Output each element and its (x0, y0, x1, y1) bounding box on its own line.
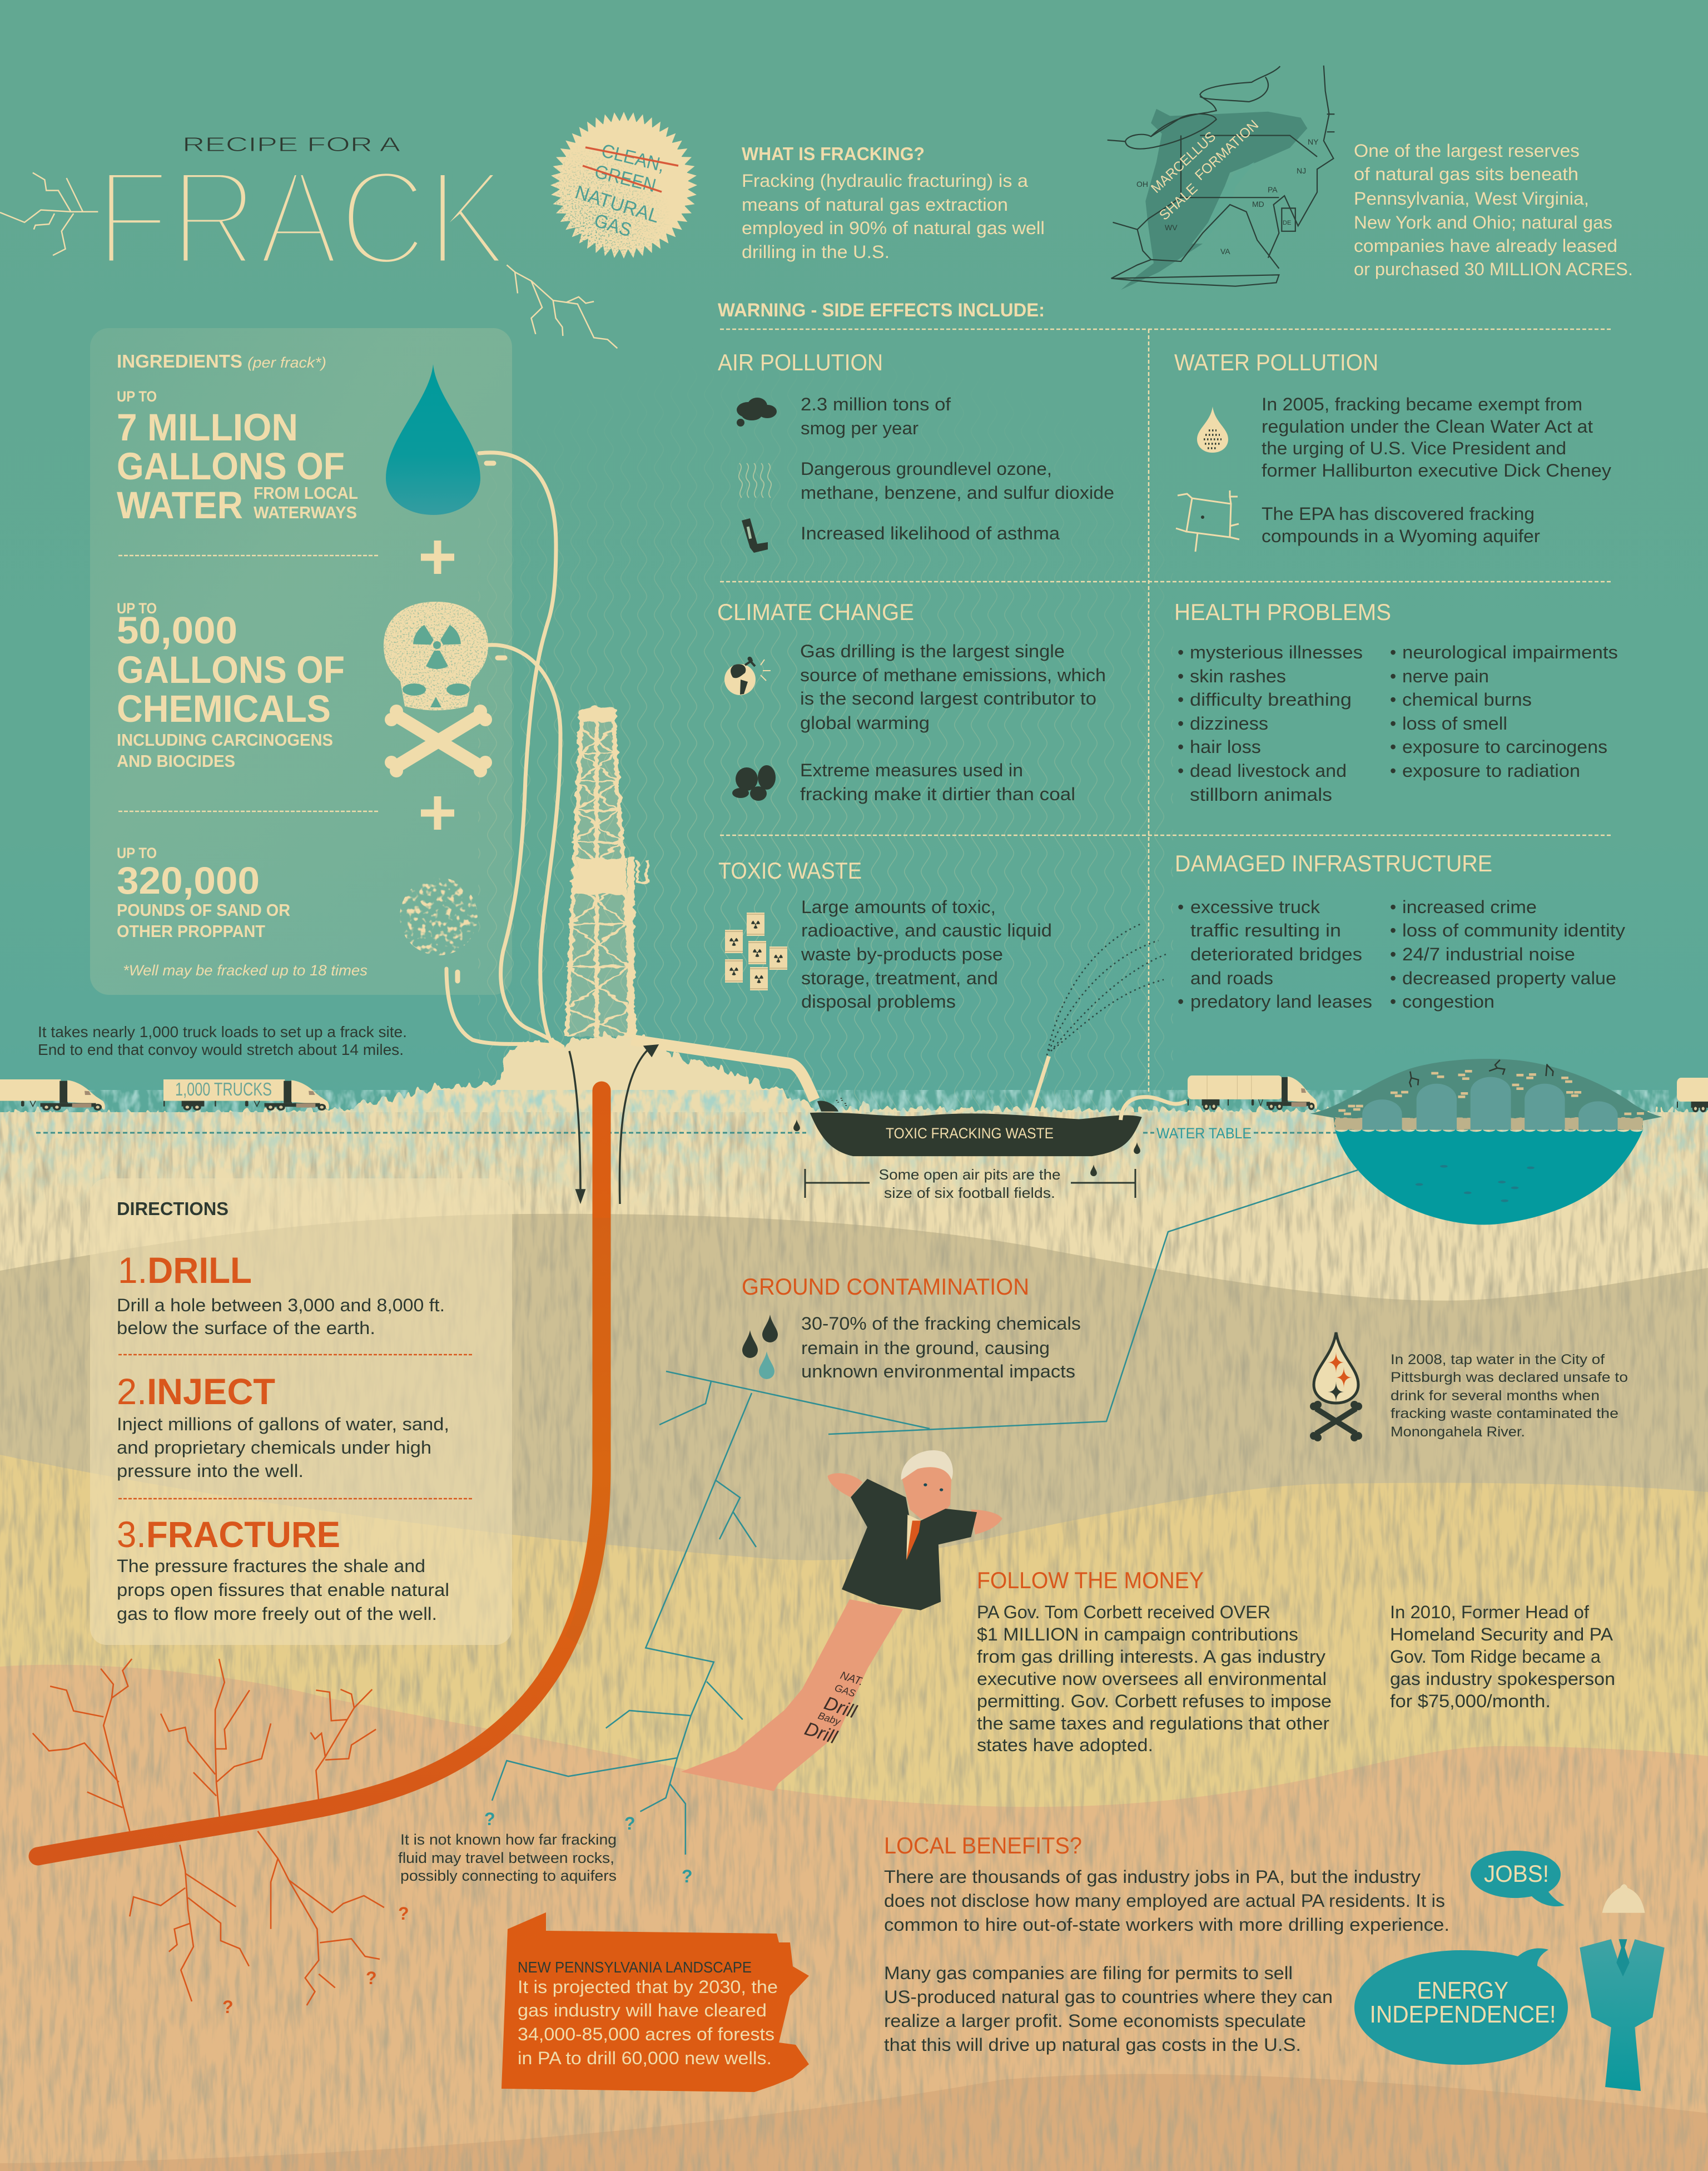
panel: damaged infrastructure: traffic resulting in (1190, 920, 1341, 940)
tom ridge note: Gov. Tom Ridge became a (1390, 1647, 1601, 1667)
feed pipes into the well (446, 453, 563, 1048)
step 2: pressure into the well. (117, 1461, 304, 1481)
pittsburgh callout: drink for several months when (1391, 1388, 1600, 1404)
water table label: WATER TABLE (1156, 1125, 1252, 1142)
drilling rig (567, 706, 647, 1038)
icon: contaminated drop (1197, 407, 1228, 453)
fluid travel note: It is not known how far fracking (400, 1831, 617, 1848)
map caption: Pennsylvania, West Virginia, (1354, 189, 1589, 209)
panel: health problems: • (1178, 666, 1184, 686)
chemicals amount: CHEMICALS (117, 687, 331, 730)
new pennsylvania landscape: 34,000-85,000 acres of forests (518, 2024, 774, 2044)
tattoo: Drill (822, 1692, 860, 1723)
toxic fracking waste pit: TOXIC FRACKING WASTE (886, 1125, 1054, 1142)
fluid travel note: possibly connecting to aquifers (400, 1867, 617, 1884)
ground layers (0, 1034, 1708, 2171)
map labels: MARCELLUS (1148, 128, 1219, 196)
puppet politician (681, 1450, 1002, 1791)
map caption: New York and Ohio; natural gas (1354, 212, 1612, 232)
orange question marks: ? (398, 1904, 409, 1924)
step 1: 1.DRILL (118, 1250, 252, 1291)
panel: health problems: HEALTH PROBLEMS (1174, 599, 1391, 625)
trucks caption (38, 1023, 407, 1058)
step 1: Drill a hole between 3,000 and 8,000 ft. (117, 1295, 445, 1315)
panel: health problems: • (1178, 713, 1184, 733)
tattoo: NAT. (838, 1669, 865, 1688)
panel: health problems: • (1390, 761, 1396, 781)
step 2: Inject millions of gallons of water, sand, (117, 1414, 449, 1434)
panel: water pollution: compounds in a Wyoming aquifer (1262, 526, 1540, 546)
ground contamination: unknown environmental impacts (801, 1361, 1075, 1381)
panel: damaged infrastructure: • (1178, 897, 1184, 917)
panel: damaged infrastructure: 24/7 industrial noise (1402, 944, 1575, 964)
panel: water pollution: The EPA has discovered fracking (1262, 504, 1535, 524)
collar and tie (906, 1515, 921, 1559)
icon: smog cloud (737, 398, 777, 427)
hands (827, 1473, 1002, 1535)
stamp text: NATURAL (573, 182, 662, 227)
teal question marks (484, 1809, 693, 1886)
panel: air pollution: Increased likelihood of asthma (801, 523, 1060, 543)
panel: air pollution: smog per year (801, 418, 918, 438)
background sky (0, 0, 1708, 1168)
panel: damaged infrastructure (1175, 850, 1625, 1012)
teal question marks: ? (682, 1866, 693, 1886)
tom ridge note: In 2010, Former Head of (1390, 1602, 1589, 1622)
bricks (1338, 1070, 1644, 1115)
panel: climate change: fracking make it dirtier than coal (800, 784, 1075, 804)
panel: water pollution: In 2005, fracking became exempt from (1262, 394, 1582, 414)
panel: water pollution (1174, 349, 1611, 552)
follow the money: permitting. Gov. Corbett refuses to impose (977, 1691, 1332, 1711)
tattoo: GAS (833, 1682, 857, 1699)
footnote: *Well may be fracked up to 18 times (123, 962, 368, 979)
map caption: companies have already leased (1354, 236, 1617, 256)
map: marcellus shale formation: DE (1283, 220, 1291, 226)
panel: health problems: • (1178, 690, 1184, 710)
icon: contaminant drops (742, 1315, 778, 1379)
chemicals amount: UP TO (117, 600, 157, 617)
teal question marks: ? (624, 1813, 635, 1833)
pipe outflow (817, 1101, 838, 1112)
local benefits: that this will drive up natural gas costs in the U.S. (884, 2035, 1301, 2055)
panel: health problems: dizziness (1190, 713, 1268, 733)
ground contamination: GROUND CONTAMINATION (742, 1273, 1029, 1300)
ingredients heading (117, 351, 326, 371)
panel: damaged infrastructure: loss of community identity (1402, 920, 1625, 940)
proppant amount: UP TO (117, 845, 157, 861)
panel: health problems: • (1178, 761, 1184, 781)
step 3 (117, 1514, 449, 1624)
step 1 (117, 1250, 445, 1338)
ingredients heading: INGREDIENTS (117, 351, 242, 371)
icon: waste barrels (725, 913, 787, 990)
panel: health problems: stillborn animals (1190, 785, 1332, 805)
icon: water drop (386, 364, 480, 515)
panel: damaged infrastructure: increased crime (1402, 897, 1537, 917)
map caption: One of the largest reserves (1354, 141, 1580, 161)
map caption: or purchased 30 MILLION ACRES. (1354, 259, 1633, 279)
map: marcellus shale formation: VA (1220, 247, 1230, 256)
water amount (117, 388, 358, 527)
stamp text: GREEN (593, 161, 658, 196)
what is fracking text block: Fracking (hydraulic fracturing) is a (742, 171, 1028, 191)
panel: directions (90, 1178, 512, 1645)
step 2: and proprietary chemicals under high (117, 1438, 431, 1458)
hair (901, 1450, 953, 1480)
bridge body (1310, 1059, 1662, 1130)
tom ridge note: gas industry spokesperson (1390, 1669, 1615, 1689)
water table dashed line (36, 1132, 1337, 1133)
chemicals amount: AND BIOCIDES (117, 751, 235, 771)
icon: inhaler (742, 518, 768, 553)
icon: skull and crossbones (384, 602, 492, 777)
step 3: props open fissures that enable natural (117, 1580, 449, 1600)
suit (842, 1479, 977, 1610)
speech bubble: energy independence: INDEPENDENCE! (1370, 2001, 1556, 2028)
reservoir water (1335, 1129, 1644, 1225)
what is fracking text block: means of natural gas extraction (742, 195, 1008, 215)
panel: toxic waste: TOXIC WASTE (718, 858, 862, 884)
panel: damaged infrastructure: congestion (1402, 992, 1494, 1012)
stamp text (573, 140, 667, 241)
panel: health problems: exposure to carcinogens (1402, 737, 1607, 757)
panel: air pollution: methane, benzene, and sulfur dioxide (801, 483, 1114, 503)
title (0, 133, 617, 348)
water amount: WATER (117, 484, 243, 527)
step 3: The pressure fractures the shale and (117, 1556, 425, 1576)
title word: FRACK (96, 141, 508, 294)
speech bubble: jobs: JOBS! (1484, 1861, 1549, 1887)
new pennsylvania landscape (502, 1912, 809, 2092)
panel: water pollution: the urging of U.S. Vice President and (1262, 438, 1566, 458)
ground contamination (742, 1273, 1081, 1381)
chemicals amount (117, 600, 345, 771)
tom ridge note: Homeland Security and PA (1390, 1624, 1613, 1644)
water amount: 7 MILLION (117, 406, 298, 449)
map: marcellus shale formation: NJ (1297, 166, 1306, 175)
panel: climate change: global warming (800, 713, 930, 733)
panel: damaged infrastructure: DAMAGED INFRASTRUCTURE (1175, 850, 1492, 876)
panel: damaged infrastructure: decreased property value (1402, 968, 1616, 988)
map labels: FORMATION (1192, 117, 1262, 184)
pittsburgh callout: Monongahela River. (1391, 1424, 1525, 1440)
panel: damaged infrastructure: • (1178, 992, 1184, 1012)
panel: damaged infrastructure: • (1390, 992, 1396, 1012)
follow the money: the same taxes and regulations that other (977, 1713, 1329, 1733)
spray pipe (1031, 1056, 1049, 1113)
new pennsylvania landscape: It is projected that by 2030, the (518, 1977, 778, 1997)
panel: air pollution: 2.3 million tons of (801, 394, 951, 414)
follow the money (977, 1567, 1615, 1755)
local benefits: Many gas companies are filing for permits to sell (884, 1963, 1293, 1983)
step 2: 2.INJECT (117, 1371, 275, 1412)
panel: health problems (1174, 599, 1618, 805)
what is fracking text block: employed in 90% of natural gas well (742, 218, 1045, 238)
panel: water pollution: regulation under the Clean Water Act at (1262, 417, 1593, 437)
title kicker: RECIPE FOR A (182, 133, 400, 156)
ingredients heading: (per frack*) (247, 354, 326, 371)
neck and head (902, 1461, 951, 1520)
panel: damaged infrastructure: and roads (1190, 968, 1273, 988)
panel: health problems: • (1390, 690, 1396, 710)
panel: damaged infrastructure: • (1390, 944, 1396, 964)
step 3: gas to flow more freely out of the well. (117, 1604, 437, 1624)
pit size callout (805, 1166, 1135, 1201)
new pennsylvania landscape: gas industry will have cleared (518, 2000, 767, 2020)
follow the money: FOLLOW THE MONEY (977, 1567, 1204, 1593)
orange question marks: ? (366, 1968, 377, 1988)
local benefits: LOCAL BENEFITS? (884, 1832, 1082, 1858)
orange question marks (222, 1904, 409, 2017)
panel: climate change (717, 599, 1106, 804)
fluid travel note (398, 1831, 617, 1884)
panel: damaged infrastructure: • (1390, 968, 1396, 988)
panel: health problems: hair loss (1190, 737, 1261, 757)
orange fracture cracks (33, 1659, 384, 2005)
tanker truck (1188, 1075, 1317, 1110)
speech bubble: jobs (1471, 1851, 1565, 1906)
icon: wyoming outline (1176, 490, 1239, 552)
panel: climate change: CLIMATE CHANGE (717, 599, 914, 625)
chemicals amount: INCLUDING CARCINOGENS (117, 730, 333, 750)
panel: climate change: source of methane emissions, which (800, 665, 1106, 685)
map labels (1148, 117, 1262, 224)
ground contamination: 30-70% of the fracking chemicals (801, 1313, 1081, 1334)
toxic waste outlet pipe (632, 1040, 815, 1100)
panel: health problems: neurological impairments (1402, 642, 1618, 662)
side effects heading: WARNING - SIDE EFFECTS INCLUDE: (718, 300, 1045, 321)
local benefits: realize a larger profit. Some economists speculate (884, 2011, 1306, 2031)
map: marcellus shale formation: NY (1308, 137, 1319, 146)
panel: health problems: nerve pain (1402, 666, 1489, 686)
panel: climate change: Extreme measures used in (800, 760, 1023, 780)
drilling waste hose (1121, 1097, 1186, 1120)
follow the money: $1 MILLION in campaign contributions (977, 1624, 1298, 1644)
panel: health problems: • (1390, 666, 1396, 686)
map: marcellus shale formation: MD (1252, 200, 1264, 209)
water amount: UP TO (117, 388, 157, 405)
map: marcellus shale formation: WV (1165, 223, 1178, 232)
panel: water pollution: WATER POLLUTION (1174, 349, 1378, 375)
truck two with label: 1,000 TRUCKS (175, 1079, 272, 1099)
what is fracking text block: drilling in the U.S. (742, 242, 890, 262)
ground contamination: remain in the ground, causing (801, 1338, 1050, 1358)
panel: water pollution: former Halliburton executive Dick Cheney (1262, 460, 1611, 480)
speech bubble: energy independence (1354, 1948, 1568, 2065)
chemicals amount: 50,000 (117, 609, 237, 652)
panel: climate change: Gas drilling is the largest single (800, 641, 1065, 661)
ground surface rough edge (0, 1034, 1708, 1179)
pit shape (810, 1112, 1142, 1156)
well bore pipe (38, 1091, 602, 1856)
teal aquifer cracks (492, 1170, 1358, 1855)
pittsburgh callout (1310, 1332, 1628, 1441)
panel: air pollution: AIR POLLUTION (718, 349, 883, 375)
local benefits: common to hire out-of-state workers with more drilling experience. (884, 1915, 1449, 1935)
map: marcellus shale formation (1108, 66, 1334, 290)
truck one (0, 1079, 105, 1111)
title cracks left (0, 173, 617, 348)
hard hat (1602, 1884, 1645, 1913)
truck at edge (1677, 1078, 1708, 1112)
teal question marks: ? (484, 1809, 495, 1829)
local benefits: US-produced natural gas to countries where they can (884, 1987, 1333, 2007)
step 1: below the surface of the earth. (117, 1318, 375, 1338)
panel: health problems: loss of smell (1402, 713, 1507, 733)
panel: toxic waste: storage, treatment, and (801, 968, 998, 988)
map caption (1354, 141, 1633, 279)
panel: health problems: skin rashes (1190, 666, 1286, 686)
panel: health problems: mysterious illnesses (1190, 642, 1363, 662)
trucks caption: It takes nearly 1,000 truck loads to set up a frack site. (38, 1023, 407, 1040)
orange question marks: ? (222, 1997, 234, 2017)
drips (793, 1119, 1140, 1176)
map: marcellus shale formation: PA (1268, 185, 1278, 194)
map labels: SHALE (1156, 181, 1200, 224)
fluid travel note: fluid may travel between rocks, (398, 1850, 614, 1866)
chemicals amount: GALLONS OF (117, 648, 345, 691)
new pennsylvania landscape: in PA to drill 60,000 new wells. (518, 2048, 772, 2068)
panel: health problems: • (1178, 642, 1184, 662)
small flow arrows (458, 463, 505, 981)
shale region (1121, 109, 1307, 290)
tom ridge note: for $75,000/month. (1390, 1691, 1551, 1711)
panel: ingredients (90, 328, 512, 995)
puppet arm (681, 1599, 903, 1791)
panel: toxic waste (718, 858, 1052, 1012)
panel: air pollution: Dangerous groundlevel ozone, (801, 459, 1052, 479)
icon: earth bomb (724, 658, 771, 695)
icon: sand swirl (400, 878, 478, 955)
pittsburgh callout: fracking waste contaminated the (1391, 1406, 1618, 1421)
panel: damaged infrastructure: predatory land leases (1190, 992, 1372, 1012)
follow the money: from gas drilling interests. A gas industry (977, 1647, 1325, 1667)
stamp: clean green natural gas (544, 105, 704, 265)
panel: health problems: dead livestock and (1190, 761, 1347, 781)
tattoo (802, 1669, 865, 1748)
pit size callout: Some open air pits are the (878, 1166, 1061, 1183)
wavy gas pattern (478, 419, 1173, 1112)
trucks caption: End to end that convoy would stretch about 14 miles. (38, 1041, 404, 1058)
speech bubble: energy independence: ENERGY (1417, 1977, 1508, 2004)
bridge cracks (1409, 1060, 1553, 1087)
panel: health problems: difficulty breathing (1190, 690, 1352, 710)
proppant amount: OTHER PROPPANT (117, 921, 265, 941)
panel: health problems: • (1390, 713, 1396, 733)
step 2 (117, 1371, 449, 1481)
follow the money: states have adopted. (977, 1735, 1153, 1755)
panel: toxic waste: radioactive, and caustic liquid (801, 920, 1052, 940)
tattoo: Drill (802, 1718, 840, 1748)
plus sign one (421, 541, 454, 574)
plus sign two (421, 796, 454, 830)
map: marcellus shale formation: OH (1136, 180, 1148, 189)
local benefits (884, 1832, 1449, 2055)
proppant amount (117, 845, 290, 941)
proppant amount: POUNDS OF SAND OR (117, 900, 290, 920)
down and up flow arrows (569, 1045, 657, 1204)
panel: toxic waste: Large amounts of toxic, (801, 897, 996, 917)
water amount: FROM LOCAL (254, 483, 358, 503)
local benefits: There are thousands of gas industry jobs in PA, but the industry (884, 1867, 1421, 1887)
stamp text: GAS (592, 210, 634, 241)
directions heading: DIRECTIONS (117, 1198, 229, 1219)
follow the money: executive now oversees all environmental (977, 1669, 1327, 1689)
what is fracking text block (742, 143, 1045, 262)
local benefits: does not disclose how many employed are actual PA residents. It is (884, 1891, 1445, 1911)
panel: health problems: chemical burns (1402, 690, 1532, 710)
follow the money: PA Gov. Tom Corbett received OVER (977, 1602, 1270, 1622)
panel: damaged infrastructure: deteriorated bridges (1190, 944, 1362, 964)
panel: health problems: • (1178, 737, 1184, 757)
new pennsylvania landscape: NEW PENNSYLVANIA LANDSCAPE (518, 1959, 752, 1976)
pittsburgh callout: Pittsburgh was declared unsafe to (1391, 1370, 1628, 1385)
spray dots (1047, 924, 1166, 1055)
fish specks (1416, 1165, 1535, 1202)
panel: toxic waste: waste by-products pose (801, 944, 1003, 964)
icon: ozone waves (739, 463, 771, 498)
panel: air pollution (718, 349, 1114, 553)
panel: health problems: exposure to radiation (1402, 761, 1580, 781)
headless gas man suit (1580, 1884, 1665, 2091)
icon: coal lumps (732, 765, 776, 801)
stamp text: CLEAN, (599, 140, 667, 176)
toxic fracking waste pit (793, 924, 1186, 1176)
panel: health problems: • (1390, 737, 1396, 757)
water amount: GALLONS OF (117, 445, 345, 488)
icon: poison drop and bones (1310, 1332, 1362, 1441)
proppant amount: 320,000 (117, 859, 260, 902)
tattoo: Baby (817, 1710, 842, 1728)
panel: health problems: • (1390, 642, 1396, 662)
panel: toxic waste: disposal problems (801, 992, 956, 1012)
tom ridge note (1390, 1602, 1615, 1711)
panel: damaged infrastructure: excessive truck (1190, 897, 1320, 917)
step 3: 3.FRACTURE (117, 1514, 340, 1555)
soil between arches (1335, 1118, 1643, 1130)
suit (1580, 1939, 1665, 2091)
what is fracking text block: WHAT IS FRACKING? (742, 143, 925, 164)
map caption: of natural gas sits beneath (1354, 164, 1578, 184)
pit size callout: size of six football fields. (884, 1184, 1055, 1201)
panel: climate change: is the second largest contributor to (800, 688, 1096, 708)
water amount: WATERWAYS (254, 503, 357, 522)
pittsburgh callout: In 2008, tap water in the City of (1391, 1352, 1605, 1367)
panel: damaged infrastructure: • (1390, 920, 1396, 940)
panel: damaged infrastructure: • (1390, 897, 1396, 917)
bridge and reservoir (1310, 1059, 1662, 1225)
truck two with label (163, 1079, 329, 1111)
